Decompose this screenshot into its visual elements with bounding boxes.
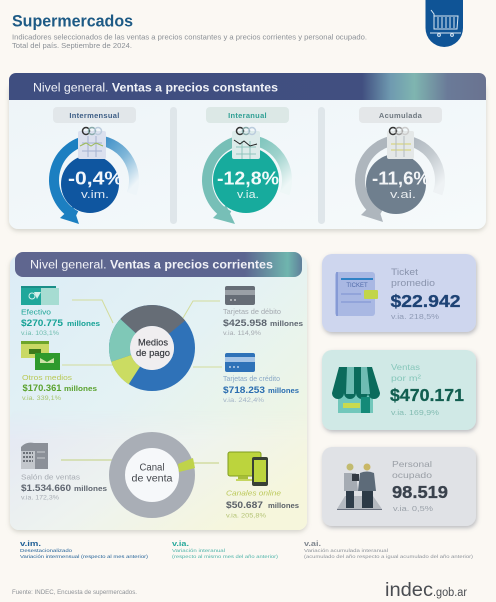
icon: tarjeta azul — [225, 353, 255, 372]
item: canales online — [226, 452, 299, 520]
icon: ticket: TICKET — [346, 283, 368, 289]
item: canales online: Canales online — [226, 488, 281, 498]
indicator: acumulada — [359, 107, 442, 222]
item: salon de ventas: v.ia. 172,3% — [21, 494, 59, 502]
icon: shopping cart badge — [426, 0, 463, 47]
legend: v.ai. — [304, 539, 473, 560]
item: efectivo: v.ia. 103,1% — [21, 330, 59, 337]
connector lines — [62, 300, 222, 367]
subtitle: Total del país. Septiembre de 2024. — [12, 41, 132, 50]
indicator: acumulada: Acumulada — [379, 111, 423, 120]
legend: v.im.: Variación intermensual (respecto al mes anterior) — [20, 554, 148, 560]
icon: tarjetas regalo — [21, 341, 60, 370]
item: otros medios — [21, 341, 97, 402]
donut chart: canal de venta: Canal — [140, 462, 164, 474]
card: personal ocupado: ocupado — [392, 470, 432, 480]
donut chart: medios de pago: de pago — [136, 348, 170, 359]
indicator: intermensual: -0,4% — [68, 168, 123, 188]
legend: v.im.: v.im. — [20, 539, 41, 548]
item: tarjetas de debito: Tarjetas de débito — [223, 307, 281, 316]
indicator: intermensual: v.im. — [81, 189, 109, 201]
heading: constantes: Nivel general. Ventas a precios constantes — [33, 82, 278, 94]
item: canales online: millones — [268, 503, 299, 510]
icon: document — [78, 128, 106, 159]
icon: personas — [337, 464, 382, 510]
indicator: intermensual: Intermensual — [69, 111, 120, 120]
heading: constantes — [9, 73, 486, 100]
card: ventas por m2: Ventas — [391, 362, 420, 372]
legend: v.im. — [20, 539, 148, 560]
divider right — [318, 107, 325, 224]
item: tarjetas de debito: millones — [270, 321, 303, 328]
card: ticket promedio: v.ia. 218,5% — [391, 312, 439, 321]
item: tarjetas de credito — [223, 353, 299, 404]
indicator: interanual: -12,8% — [217, 168, 279, 188]
card: ticket promedio: Ticket — [391, 267, 419, 277]
legend: v.ai.: v.ai. — [304, 539, 321, 548]
card: ventas por m2: por m² — [391, 373, 421, 383]
source: Fuente: INDEC, Encuesta de supermercados. — [12, 590, 137, 596]
legend: v.ia.: v.ia. — [172, 539, 189, 548]
card: personal ocupado: v.ia. 0,5% — [393, 504, 433, 513]
card: personal ocupado: Personal — [392, 459, 432, 469]
panel: ventas a precios constantes — [9, 73, 486, 229]
legend: v.ia.: (respecto al mismo mes del año anterior) — [172, 554, 278, 560]
card: personal ocupado: 98.519 — [392, 482, 448, 502]
item: canales online: v.ia. 205,8% — [226, 512, 266, 520]
item: otros medios: v.ia. 339,1% — [22, 395, 61, 402]
item: tarjetas de debito — [223, 286, 303, 337]
heading: corrientes: Nivel general. Ventas a precios corrientes — [30, 260, 273, 272]
divider left — [170, 107, 177, 224]
icon: ticket — [335, 272, 378, 316]
item: efectivo: millones — [67, 321, 100, 328]
card: ventas por m2: v.ia. 169,9% — [391, 408, 439, 417]
item: otros medios: $170.361 — [22, 383, 62, 394]
item: tarjetas de credito: Tarjetas de crédito — [223, 374, 280, 383]
item: tarjetas de debito: $425.958 — [223, 318, 267, 329]
card: personal ocupado — [322, 447, 476, 526]
item: tarjetas de credito: millones — [268, 388, 299, 395]
item: otros medios: millones — [64, 386, 97, 393]
panel: ventas a precios corrientes — [10, 252, 307, 530]
item: tarjetas de credito: v.ia. 242,4% — [223, 397, 264, 404]
item: salon de ventas — [21, 443, 107, 502]
item: efectivo: Efectivo — [21, 308, 51, 316]
indicator: acumulada: -11,6% — [372, 168, 430, 188]
item: tarjetas de credito: $718.253 — [223, 385, 265, 396]
icon: tarjeta gris — [225, 286, 255, 305]
indicator: acumulada: v.ai. — [390, 189, 416, 201]
donut chart: canal de venta: de venta — [132, 474, 173, 484]
card: ticket promedio: $22.942 — [390, 291, 461, 311]
icon: monitor y telefono — [228, 452, 268, 486]
heading: corrientes — [15, 252, 302, 277]
card: ventas por m2: $470.171 — [390, 385, 464, 405]
donut chart: canal de venta — [117, 440, 195, 510]
indicator: intermensual — [53, 107, 136, 224]
indicator: interanual: Interanual — [228, 111, 267, 120]
card: ticket promedio: promedio — [391, 278, 435, 288]
icon: document — [387, 128, 414, 159]
icon: document — [232, 128, 260, 159]
item: salon de ventas: Salón de ventas — [21, 472, 80, 482]
card: ticket promedio — [322, 254, 476, 332]
logo: indec.gob.ar: .gob.ar — [433, 587, 467, 599]
logo: indec.gob.ar: indec — [385, 580, 433, 601]
item: canales online: $50.687 — [226, 500, 263, 511]
item: efectivo — [21, 286, 100, 337]
icon: local comercial — [332, 367, 380, 413]
indicator: interanual — [206, 107, 289, 224]
item: otros medios: Otros medios — [22, 373, 72, 382]
legend: v.ai.: (acumulado del año respecto a igual acumulado del año anterior) — [304, 554, 473, 560]
icon: billete — [21, 286, 59, 305]
legend: v.ia.: Variación interanual — [172, 548, 225, 554]
subtitle — [12, 32, 367, 50]
connector lines canal — [61, 460, 219, 463]
legend: v.ia. — [172, 539, 278, 560]
subtitle: Indicadores seleccionados de las ventas a precios constantes y a precios corrientes y personal ocupado. — [12, 32, 367, 42]
item: salon de ventas: $1.534.660 — [21, 483, 71, 494]
indicator: interanual: v.ia. — [237, 189, 259, 201]
legend: v.im.: Desestacionalizado — [20, 548, 72, 554]
icon: edificio — [21, 443, 48, 469]
donut chart: medios de pago — [109, 305, 185, 384]
card: ventas por m2 — [322, 350, 476, 430]
item: tarjetas de debito: v.ia. 114,9% — [223, 330, 261, 337]
item: efectivo: $270.775 — [21, 318, 64, 329]
donut chart: medios de pago: Medios — [138, 338, 168, 348]
logo: indec.gob.ar — [385, 580, 467, 601]
item: salon de ventas: millones — [74, 486, 107, 493]
legend: v.ai.: Variación acumulada interanual — [304, 548, 388, 554]
title: Supermercados — [12, 12, 133, 30]
